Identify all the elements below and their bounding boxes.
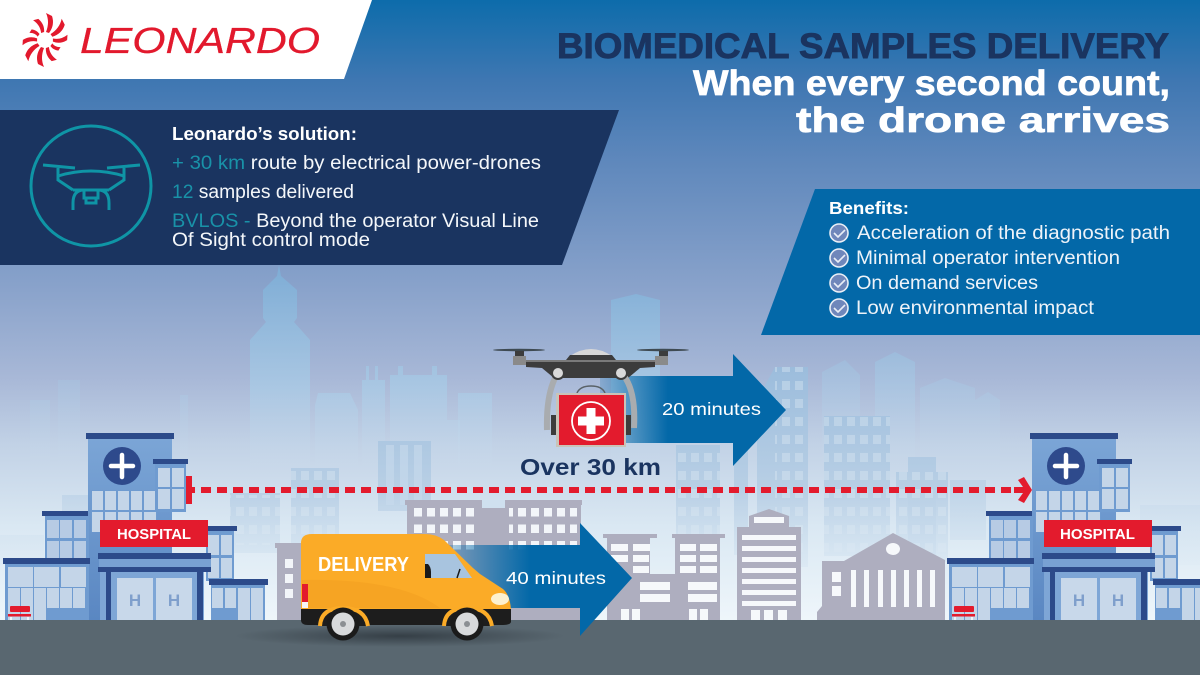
grey city buildings (275, 500, 945, 620)
wheel arches (320, 608, 368, 626)
benefits list: On demand services (856, 273, 1038, 294)
benefits list (856, 223, 1170, 319)
right hospital: H (1112, 591, 1124, 610)
solution text: + 30 km route by electrical power-drones (172, 153, 541, 174)
benefits list: Minimal operator intervention (856, 248, 1120, 269)
van window (425, 554, 472, 578)
hospital sign right: HOSPITAL (1060, 527, 1135, 543)
solution text: BVLOS - Beyond the operator Visual Line (172, 211, 539, 232)
classical bank building (817, 533, 945, 620)
dashed route arrow (186, 476, 1032, 504)
benefits list: Low environmental impact (856, 298, 1095, 319)
van lamps (491, 593, 509, 605)
panel: benefits: Benefits: (829, 198, 909, 218)
title: When every second count, (693, 64, 1170, 103)
body (526, 355, 655, 378)
delivery van (235, 534, 565, 647)
small building left of van (275, 543, 305, 620)
van shadow (235, 625, 565, 647)
striped tower (737, 509, 801, 620)
wheels (326, 608, 484, 640)
solution text: 12 samples delivered (172, 182, 354, 203)
icon: check marks (830, 224, 848, 317)
panel: Leonardo's solution (0, 110, 619, 265)
left hospital (3, 433, 268, 620)
case handle (577, 386, 605, 393)
hospital sign left (100, 520, 208, 547)
arms (547, 376, 556, 430)
background skyline (0, 265, 1200, 585)
solution text: Of Sight control mode (172, 230, 370, 251)
right hospital: H (1073, 591, 1085, 610)
propellers (493, 349, 689, 365)
van body (301, 534, 511, 612)
hospital sign left: HOSPITAL (117, 527, 191, 543)
hospital sign right (1044, 520, 1152, 547)
arrow: 40 minutes (440, 523, 632, 636)
benefits list: Acceleration of the diagnostic path (857, 223, 1170, 244)
wordmark: LEONARDO (80, 20, 320, 61)
right hospital (947, 433, 1200, 620)
arrow: 20 minutes (600, 354, 786, 466)
arrow: 40 minutes: 40 minutes (506, 568, 606, 588)
left hospital: H (129, 591, 141, 610)
van lettering: DELIVERY (318, 554, 410, 576)
van skirt (301, 609, 511, 625)
left hospital: H (168, 591, 180, 610)
title (557, 27, 1170, 140)
panel: logo (0, 0, 372, 79)
distance label: Over 30 km (520, 454, 661, 480)
solution text: Leonardo’s solution: (172, 124, 357, 144)
drone carrying medical case (493, 349, 689, 447)
icon: drone in circle (31, 126, 151, 246)
road (0, 620, 1200, 675)
panel: benefits (761, 189, 1200, 335)
building group behind van (405, 500, 582, 620)
solution text (172, 124, 541, 251)
arrow: 20 minutes: 20 minutes (662, 399, 761, 419)
title: the drone arrives (796, 101, 1170, 140)
dome (570, 349, 612, 356)
title: BIOMEDICAL SAMPLES DELIVERY (557, 27, 1169, 66)
icon: Leonardo swirl (21, 13, 69, 67)
twin blocks (603, 534, 725, 620)
case (556, 393, 626, 447)
